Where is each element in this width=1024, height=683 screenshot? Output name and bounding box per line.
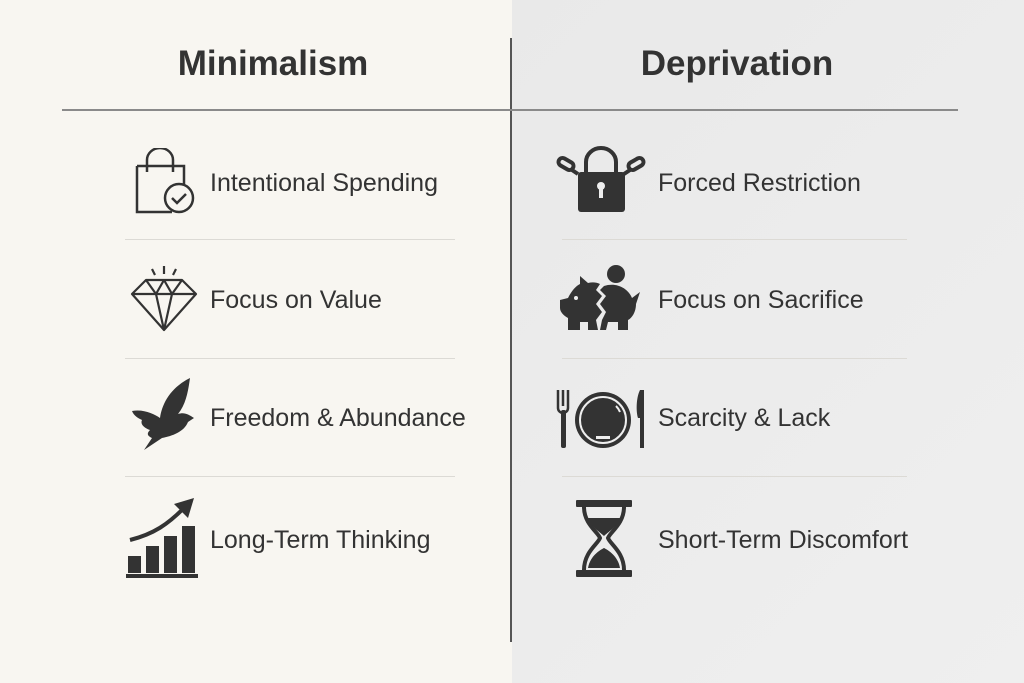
text: Focus on Sacrifice: Focus on Sacrifice — [658, 286, 864, 314]
icon: bar chart with arrow — [126, 498, 198, 578]
icon: padlock with chains — [556, 146, 646, 212]
horizontal header rule — [62, 109, 958, 111]
text: Forced Restriction: Forced Restriction — [658, 169, 861, 197]
text: Long-Term Thinking: Long-Term Thinking — [210, 526, 430, 554]
icon: diamond — [130, 266, 198, 332]
title: Minimalism: Minimalism — [178, 44, 368, 83]
icon: shopping bag with check — [136, 148, 194, 214]
text: Freedom & Abundance: Freedom & Abundance — [210, 404, 466, 432]
icon: plate with fork and knife — [556, 390, 644, 448]
text: Scarcity & Lack: Scarcity & Lack — [658, 404, 830, 432]
text: Short-Term Discomfort: Short-Term Discomfort — [658, 526, 908, 554]
title: Deprivation: Deprivation — [641, 44, 833, 83]
icon: broken piggy bank — [560, 265, 640, 330]
text: Intentional Spending: Intentional Spending — [210, 169, 438, 197]
icon: hourglass — [576, 500, 632, 577]
vertical divider — [510, 38, 512, 642]
icon: bird — [132, 378, 194, 450]
text: Focus on Value: Focus on Value — [210, 286, 382, 314]
